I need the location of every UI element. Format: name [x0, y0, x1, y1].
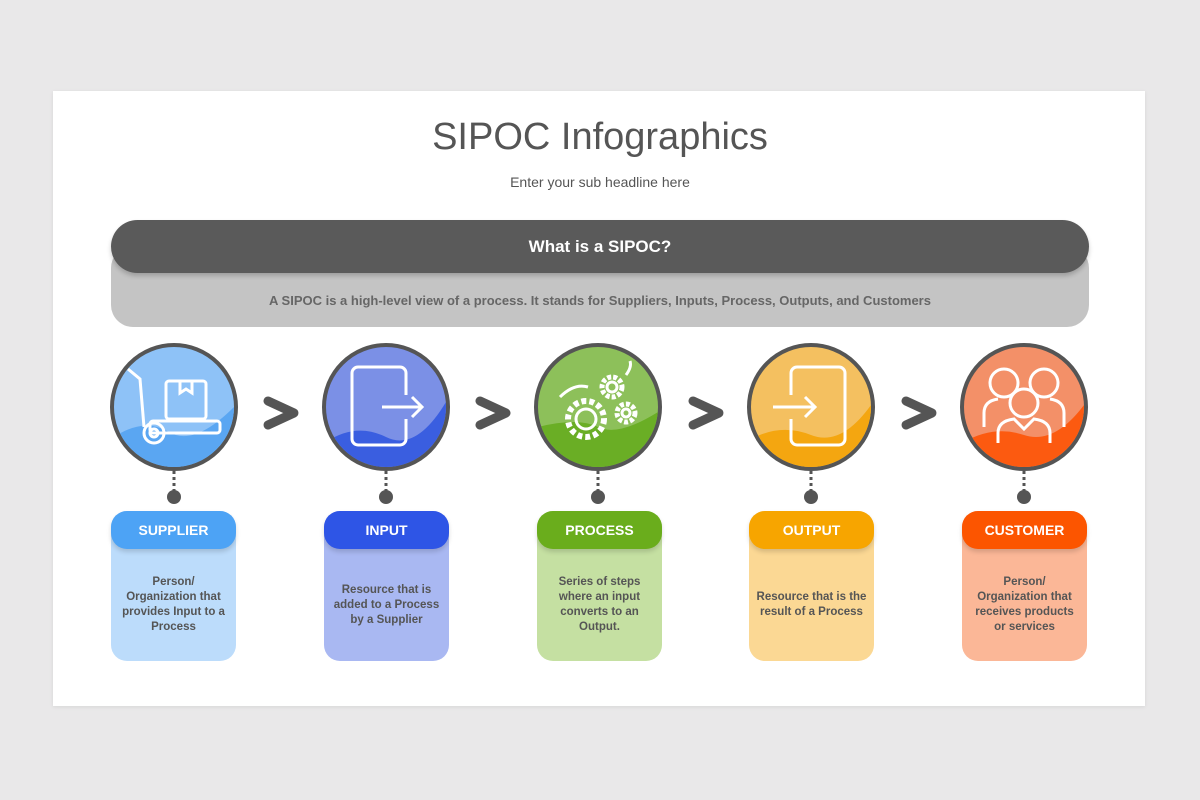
icon: customer circle [960, 343, 1088, 471]
text: input description: by a Supplier [350, 614, 423, 626]
arrow 3 [688, 396, 724, 430]
definition band [111, 246, 1089, 327]
text: process description [558, 576, 640, 633]
label: supplier [111, 511, 236, 549]
label: process: PROCESS [565, 522, 634, 538]
text: supplier description: Organization that [126, 591, 221, 603]
subtitle: Enter your sub headline here [510, 174, 690, 190]
header bar [111, 220, 1089, 273]
panel: supplier [111, 511, 236, 661]
text: supplier description: provides Input to a [122, 606, 225, 618]
arrow 4 [902, 396, 936, 430]
connector 1 [167, 471, 181, 504]
label: output [749, 511, 874, 549]
text: output description: Resource that is the [757, 591, 866, 603]
text: process description: Series of steps [559, 576, 640, 588]
connector 2 [379, 471, 393, 504]
connector 3 [591, 471, 605, 504]
icon: input circle [322, 343, 450, 471]
definition band: A SIPOC is a high-level view of a process. It stands for Suppliers, Inputs, Process, Outputs, and Customers [269, 293, 931, 308]
label: customer [962, 511, 1087, 549]
panel: process [537, 511, 662, 661]
icon: supplier circle [110, 343, 238, 471]
connector 4 [804, 471, 818, 504]
panel: input [324, 511, 449, 661]
panel: card [53, 91, 1145, 706]
text: process description: where an input [559, 591, 640, 603]
label: output: OUTPUT [783, 522, 840, 538]
text: supplier description: Process [151, 621, 196, 633]
text: customer description [975, 576, 1074, 633]
text: input description: added to a Process [334, 598, 439, 610]
title: SIPOC Infographics [432, 116, 768, 158]
label: supplier: SUPPLIER [138, 522, 208, 538]
text: process description: Output. [579, 621, 620, 633]
text: supplier description [122, 576, 225, 633]
text: supplier description: Person/ [152, 576, 195, 588]
text: input description [334, 584, 439, 626]
text: output description: result of a Process [760, 606, 863, 618]
connector 5 [1017, 471, 1031, 504]
arrow 2 [476, 396, 510, 430]
arrow 1 [264, 396, 298, 430]
label: input: INPUT [366, 522, 408, 538]
label: input [324, 511, 449, 549]
header bar: What is a SIPOC? [529, 237, 671, 256]
text: input description: Resource that is [342, 584, 431, 596]
icon: process circle [534, 343, 662, 471]
text: customer description: or services [994, 621, 1055, 633]
panel: what is sipoc [109, 220, 1091, 327]
text: customer description: Person/ [1003, 576, 1046, 588]
text: customer description: Organization that [977, 591, 1072, 603]
panel: customer [962, 511, 1087, 661]
text: process description: converts to an [560, 606, 639, 618]
label: customer: CUSTOMER [985, 522, 1064, 538]
panel: output [749, 511, 874, 661]
icon: output circle [747, 343, 875, 471]
text: output description [757, 591, 866, 618]
label: process [537, 511, 662, 549]
text: customer description: receives products [975, 606, 1074, 618]
